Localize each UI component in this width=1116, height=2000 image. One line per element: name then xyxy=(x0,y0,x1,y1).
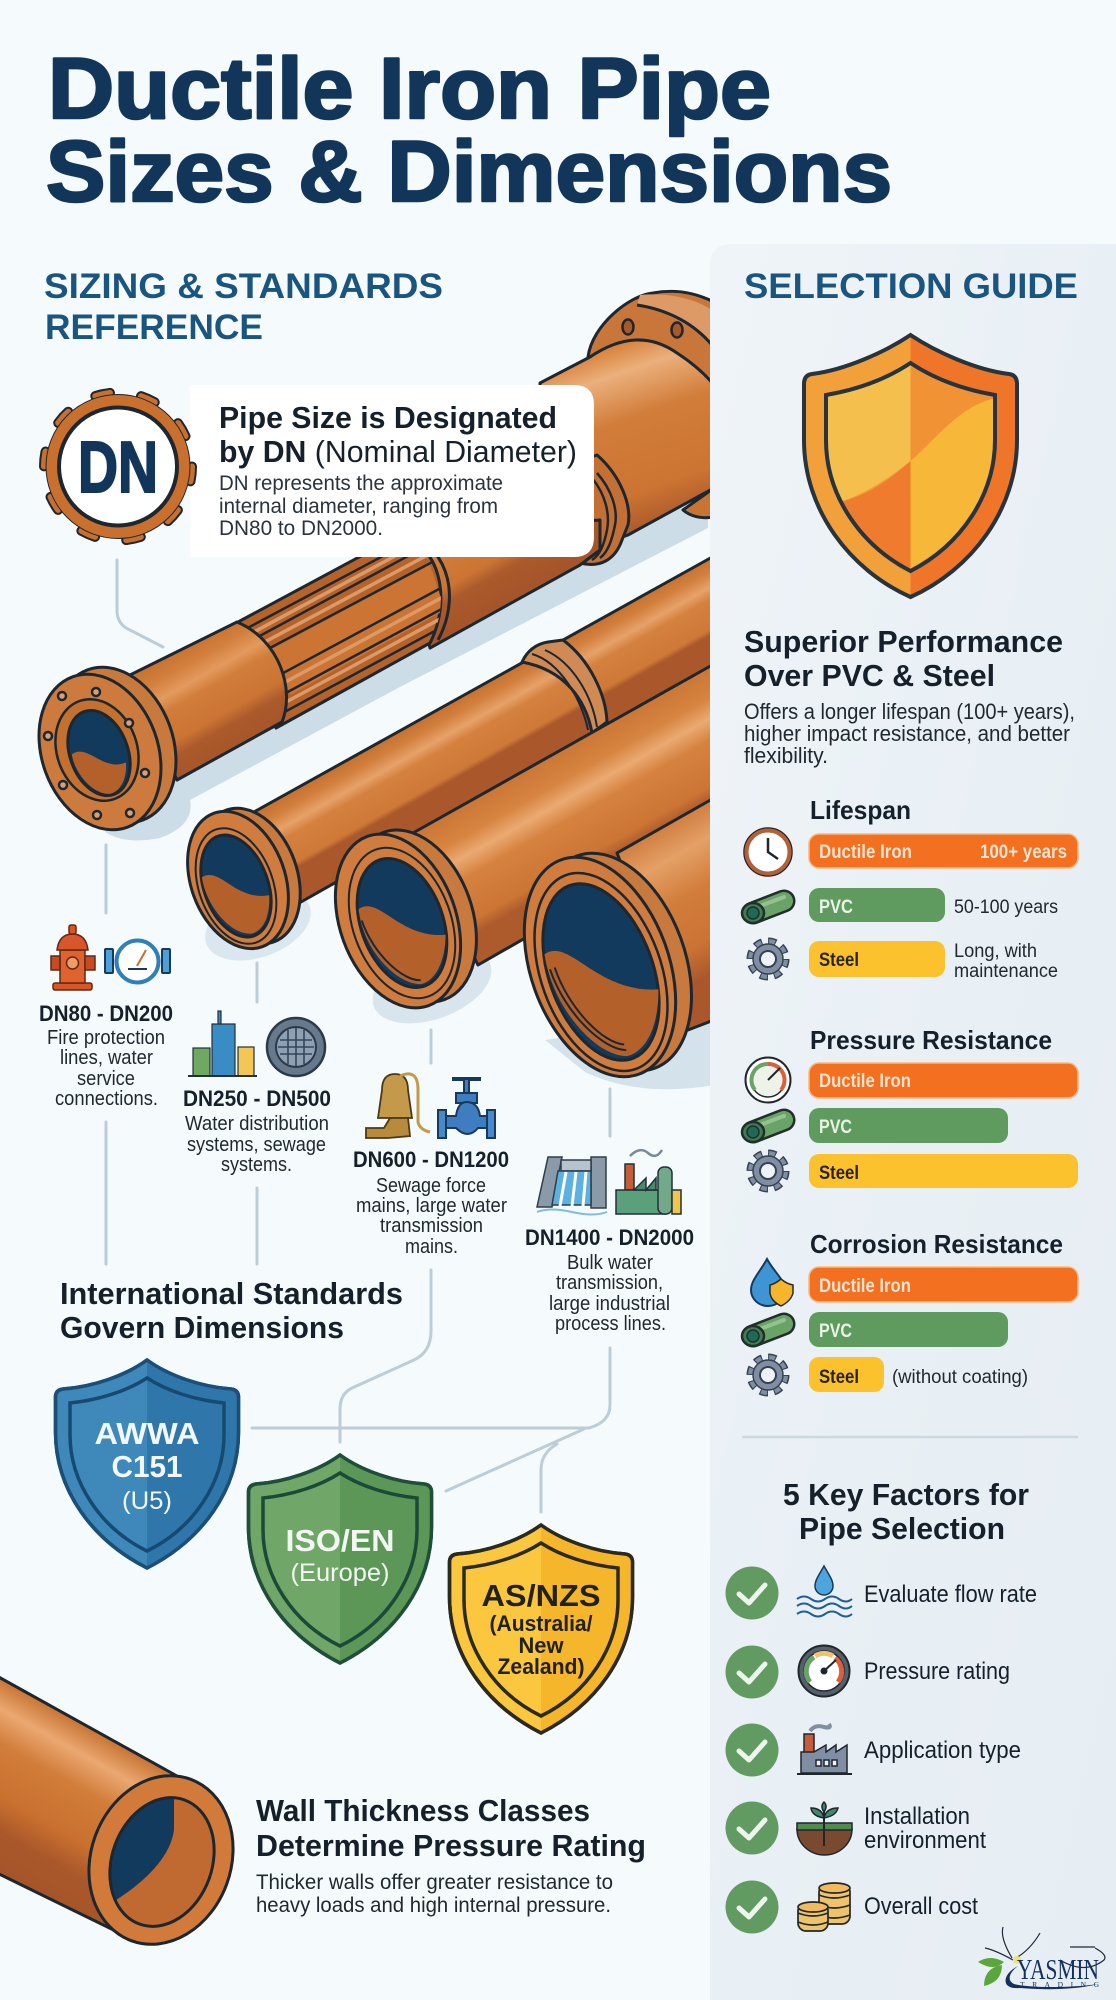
size label: DN600 - DN1200 xyxy=(353,1147,509,1172)
shield: AWWA: (U5) xyxy=(122,1487,172,1515)
flange upper rim xyxy=(637,294,714,346)
shield: AWWA: C151 xyxy=(112,1449,182,1484)
callout: DN designation xyxy=(190,385,594,557)
callout heading: Pipe Size is Designated xyxy=(219,401,557,435)
large cylinder xyxy=(540,340,714,560)
body xyxy=(0,1675,215,1941)
shield: AS/NZS: New xyxy=(518,1633,564,1658)
socket face xyxy=(313,817,483,1025)
factor: flow rate: Evaluate flow rate xyxy=(864,1581,1037,1608)
connector lines xyxy=(106,560,610,1512)
description: lines, water xyxy=(60,1047,153,1069)
pipe group: top flanged pipe xyxy=(18,291,714,847)
flange bolts xyxy=(44,688,149,819)
text: performance summary: Offers a longer lifespan (100+ years), xyxy=(744,699,1075,724)
description: systems, sewage xyxy=(187,1134,326,1156)
icon: industrial plant xyxy=(616,1150,681,1214)
size tier: DN250 - DN500 xyxy=(183,1011,331,1176)
chart heading: Pressure Resistance xyxy=(810,1025,1052,1055)
heading: Wall Thickness Classes xyxy=(256,1793,590,1828)
description: Bulk water xyxy=(567,1252,653,1274)
rear flange lower piece xyxy=(683,488,714,518)
description: connections. xyxy=(55,1088,158,1110)
icon: clock xyxy=(744,828,792,876)
text: wall thickness xyxy=(256,1793,646,1917)
pipe 2 xyxy=(170,556,714,963)
icon: check xyxy=(726,1802,778,1854)
DN gear badge: DN xyxy=(78,428,158,508)
ribbed section xyxy=(225,535,441,728)
socket face xyxy=(170,797,306,963)
description: mains, large water xyxy=(356,1195,507,1217)
bar: steel: Long, with xyxy=(954,941,1037,962)
size tier: DN600 - DN1200 xyxy=(353,1074,509,1258)
shield: AS/NZS: AS/NZS xyxy=(482,1578,600,1613)
factor: pressure rating: Pressure rating xyxy=(864,1658,1010,1685)
icon: gauge xyxy=(746,1058,790,1102)
size tier: DN1400 - DN2000 xyxy=(525,1150,694,1335)
icon: pvc pipe xyxy=(742,1320,784,1346)
heading: superior performance: Over PVC & Steel xyxy=(744,659,995,693)
callout body: DN represents the approximate xyxy=(219,472,503,495)
factor: overall cost: Overall cost xyxy=(864,1893,978,1920)
bar: ductile iron: 100+ years xyxy=(980,842,1067,863)
collar xyxy=(556,455,629,564)
icon: city skyline xyxy=(188,1011,257,1076)
icon: manhole cover xyxy=(267,1018,325,1076)
heading: five key factors xyxy=(783,1477,1029,1546)
socket back xyxy=(329,813,499,1019)
title xyxy=(46,41,892,220)
icon: pvc pipe xyxy=(742,1116,784,1142)
shield: ISO/EN: ISO/EN xyxy=(286,1523,394,1558)
pipe shadows xyxy=(105,490,714,1089)
shield: AWWA: AWWA xyxy=(94,1416,200,1451)
bar: steel: (without coating) xyxy=(892,1367,1028,1388)
DN gear badge xyxy=(44,392,192,540)
icon: steel gear xyxy=(751,1358,785,1392)
factor: overall cost xyxy=(726,1880,978,1934)
bar: ductile iron: Ductile Iron xyxy=(819,1276,911,1297)
size label: DN250 - DN500 xyxy=(183,1086,331,1111)
pipe 3 xyxy=(313,664,714,1025)
shield: ISO/EN xyxy=(248,1455,432,1663)
heading: sizing and standards reference: REFERENCE xyxy=(45,308,263,347)
socket bore xyxy=(181,817,291,955)
bar: steel: Steel xyxy=(819,1367,859,1388)
bar: steel xyxy=(809,941,1058,982)
body: heavy loads and high internal pressure. xyxy=(256,1894,611,1917)
bore xyxy=(92,1783,232,1941)
description: service xyxy=(77,1068,135,1090)
icon: flow meter xyxy=(105,940,170,982)
description xyxy=(549,1252,670,1335)
description xyxy=(47,1027,165,1110)
bar: ductile iron xyxy=(809,1267,1078,1302)
heading: superior performance: Superior Performance xyxy=(744,625,1063,659)
callout body: internal diameter, ranging from xyxy=(219,495,498,518)
heading: sizing and standards reference: SIZING & STANDARDS xyxy=(44,267,443,306)
bore shadow xyxy=(111,1799,174,1900)
flange face xyxy=(18,657,182,847)
size tier: DN80 - DN200 xyxy=(39,925,173,1110)
bar: steel: Steel xyxy=(819,1163,859,1184)
heading: international standards: Govern Dimensions xyxy=(60,1310,344,1345)
icon: water xyxy=(797,1566,852,1616)
chart heading: Corrosion Resistance xyxy=(810,1229,1063,1259)
icon: steel gear xyxy=(751,942,785,976)
socket back xyxy=(513,832,719,1092)
size label: DN80 - DN200 xyxy=(39,1001,173,1026)
bar: steel xyxy=(809,1154,1078,1188)
body xyxy=(617,798,714,1030)
pipe: wall thickness cross-section xyxy=(0,1676,235,1946)
shield: AS/NZS: (Australia/ xyxy=(490,1611,592,1636)
bar: pvc: PVC xyxy=(819,1321,852,1342)
heading: international standards: International Standards xyxy=(60,1276,403,1311)
bar: steel: maintenance xyxy=(954,961,1058,982)
bore outline xyxy=(92,1783,232,1941)
socket back xyxy=(182,794,318,958)
body xyxy=(256,1871,613,1917)
bar: pvc: PVC xyxy=(819,897,853,918)
factor: installation environment: environment xyxy=(864,1827,986,1854)
heading: sizing and standards reference xyxy=(44,267,443,347)
bar: pvc xyxy=(809,1312,1008,1347)
icon: check xyxy=(726,1724,778,1776)
description: Water distribution xyxy=(185,1113,329,1135)
title: Ductile Iron Pipe xyxy=(48,41,771,137)
icon: factory xyxy=(797,1724,852,1774)
bar: steel: Steel xyxy=(819,950,859,971)
body: Thicker walls offer greater resistance to xyxy=(256,1871,613,1894)
bar: pvc xyxy=(809,888,1058,922)
body between ribs and collar xyxy=(400,520,600,648)
socket face xyxy=(496,836,704,1098)
text: performance summary: higher impact resistance, and better xyxy=(744,721,1070,746)
pipe 4 xyxy=(496,798,719,1098)
shield: AWWA xyxy=(56,1360,238,1568)
plain section xyxy=(130,622,287,780)
icon: water drop and shield xyxy=(751,1259,793,1306)
bar: ductile iron xyxy=(809,1063,1078,1098)
heading: Determine Pressure Rating xyxy=(256,1828,646,1863)
icon: coins xyxy=(798,1883,850,1931)
size label: DN1400 - DN2000 xyxy=(525,1225,694,1250)
factor: application type xyxy=(726,1724,1021,1776)
description: transmission, xyxy=(556,1272,663,1294)
shield: AS/NZS: Zealand) xyxy=(498,1654,584,1679)
flange bore xyxy=(57,702,141,804)
shield: AS/NZS xyxy=(450,1525,632,1733)
bar: pvc xyxy=(809,1108,1008,1143)
icon: check xyxy=(726,1880,778,1934)
icon: submersible pump xyxy=(366,1074,430,1138)
factor: installation environment xyxy=(726,1802,986,1855)
description xyxy=(356,1175,507,1258)
shield: ISO/EN: (Europe) xyxy=(290,1559,390,1587)
description: process lines. xyxy=(555,1313,666,1335)
chart: pressure resistance xyxy=(742,1025,1078,1188)
text: performance summary: flexibility. xyxy=(744,743,828,768)
icon: gate valve xyxy=(438,1079,495,1138)
socket bore xyxy=(509,855,693,1089)
chart: lifespan xyxy=(742,795,1078,982)
callout body xyxy=(219,472,503,540)
icon: check xyxy=(726,1566,778,1620)
flange bolts xyxy=(622,320,682,338)
rear flange xyxy=(588,291,714,500)
factor: installation environment: Installation xyxy=(864,1803,970,1830)
heading: five key factors: Pipe Selection xyxy=(799,1511,1005,1546)
description xyxy=(185,1113,329,1176)
description: large industrial xyxy=(549,1293,670,1315)
description: Sewage force xyxy=(376,1175,486,1197)
panel: selection guide xyxy=(710,244,1116,2000)
description: systems. xyxy=(221,1154,292,1176)
bar: steel xyxy=(809,1357,1028,1392)
description: transmission xyxy=(380,1215,483,1237)
chart: corrosion resistance xyxy=(742,1229,1078,1392)
logo: Yasmin Trading: TRADING xyxy=(1020,1980,1100,1989)
icon: steel gear xyxy=(751,1154,785,1188)
description: mains. xyxy=(405,1236,458,1258)
heading: five key factors: 5 Key Factors for xyxy=(783,1477,1029,1512)
icon: large shield xyxy=(804,335,1017,597)
socket bore xyxy=(329,833,475,1013)
bar: pvc: 50-100 years xyxy=(954,897,1058,918)
body xyxy=(254,556,714,902)
description: Fire protection xyxy=(47,1027,165,1049)
title: Sizes & Dimensions xyxy=(46,124,892,220)
chart heading: Lifespan xyxy=(810,795,911,825)
bar: pvc: PVC xyxy=(819,1117,852,1138)
bar: ductile iron: Ductile Iron xyxy=(819,842,912,863)
factor: pressure rating xyxy=(726,1646,1010,1698)
joint collar xyxy=(522,640,607,733)
icon: soil and sprout xyxy=(797,1802,852,1855)
logo: Yasmin Trading xyxy=(978,1927,1105,1989)
panel heading: SELECTION GUIDE xyxy=(744,267,1078,306)
bar: ductile iron xyxy=(809,834,1078,868)
callout: DN designation: by DN (Nominal Diameter) xyxy=(219,435,577,469)
flange back xyxy=(33,650,197,840)
factor: application type: Application type xyxy=(864,1737,1021,1764)
icon: dam xyxy=(537,1157,607,1214)
heading: superior performance xyxy=(744,625,1063,693)
bar: ductile iron: Ductile Iron xyxy=(819,1071,911,1092)
body xyxy=(413,664,714,965)
rib end ring xyxy=(410,535,449,640)
heading xyxy=(256,1793,646,1863)
heading: international standards xyxy=(60,1276,403,1345)
icon: check xyxy=(726,1646,778,1698)
icon: fire hydrant xyxy=(51,925,95,990)
callout body: DN80 to DN2000. xyxy=(219,517,383,540)
factor: flow rate xyxy=(726,1566,1037,1620)
wall end xyxy=(66,1755,256,1965)
text: performance summary xyxy=(744,699,1075,768)
icon: pvc pipe xyxy=(742,897,784,923)
icon: gauge xyxy=(798,1646,850,1696)
